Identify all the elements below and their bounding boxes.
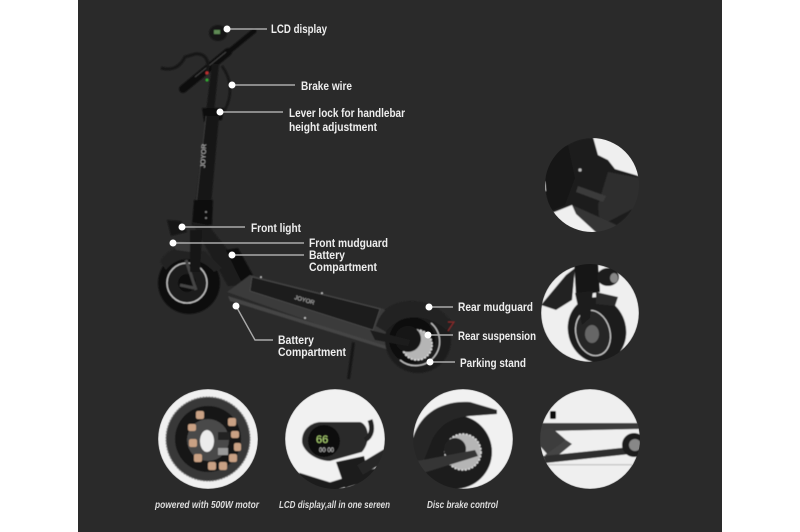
callout: rear mudguard <box>426 302 533 314</box>
scooter illustration <box>158 25 454 379</box>
front light <box>167 220 187 236</box>
caption: LCD: LCD display,all in one sereen <box>279 500 390 511</box>
callout: brake wire: Brake wire <box>301 81 352 93</box>
detail circle: LCD controller: 00 00 <box>319 448 335 454</box>
brake wire <box>222 66 230 112</box>
handlebar <box>161 25 254 89</box>
callout: lever lock: Lever lock for handlebar <box>289 108 405 120</box>
detail circle: side frame <box>540 389 646 489</box>
callout: front mudguard <box>170 238 388 250</box>
front mudguard and fork <box>160 248 222 272</box>
deck: JOYOR <box>293 295 316 307</box>
callout: battery compartment lower: Compartment <box>278 347 346 359</box>
front wheel <box>158 252 220 314</box>
rear fork <box>370 330 410 346</box>
caption: motor: powered with 500W motor <box>154 500 260 511</box>
deck <box>227 275 407 351</box>
detail circle: motor <box>158 389 258 489</box>
callout: front mudguard: Front mudguard <box>309 238 388 250</box>
callout: rear suspension <box>424 331 536 343</box>
detail circle: LCD controller <box>285 389 390 489</box>
callout: LCD display: LCD display <box>271 24 327 36</box>
callout: battery compartment upper: Battery <box>309 250 346 262</box>
callout: rear suspension: Rear suspension <box>458 331 536 343</box>
callout: brake wire <box>228 81 352 93</box>
detail circle: folding joint <box>545 138 638 232</box>
callout: battery compartment upper <box>228 250 377 274</box>
callout: front light <box>178 223 301 235</box>
stem: JOYOR <box>200 144 208 168</box>
caption: disc brake: Disc brake control <box>427 500 498 511</box>
callout: front light: Front light <box>251 223 301 235</box>
stem <box>192 64 224 225</box>
parking stand <box>347 342 355 379</box>
callout: LCD display <box>224 24 327 36</box>
callout: parking stand <box>426 358 526 370</box>
callout: lever lock <box>216 108 405 134</box>
detail circle: front wheel <box>541 262 639 369</box>
rear wheel <box>385 307 451 373</box>
copper coils <box>188 411 241 470</box>
callout: rear mudguard: Rear mudguard <box>458 302 533 314</box>
callout: battery compartment upper: Compartment <box>309 262 377 274</box>
callout: battery compartment lower: Battery <box>278 335 315 347</box>
detail circle: disc brake <box>412 389 513 489</box>
front frame neck <box>192 222 250 286</box>
callout: lever lock: height adjustment <box>289 122 377 134</box>
detail circle: LCD controller: 66 <box>316 434 328 446</box>
callout: battery compartment lower <box>232 302 346 359</box>
rear mudguard <box>376 301 454 332</box>
callout: parking stand: Parking stand <box>460 358 526 370</box>
battery compartment neck <box>226 248 253 283</box>
